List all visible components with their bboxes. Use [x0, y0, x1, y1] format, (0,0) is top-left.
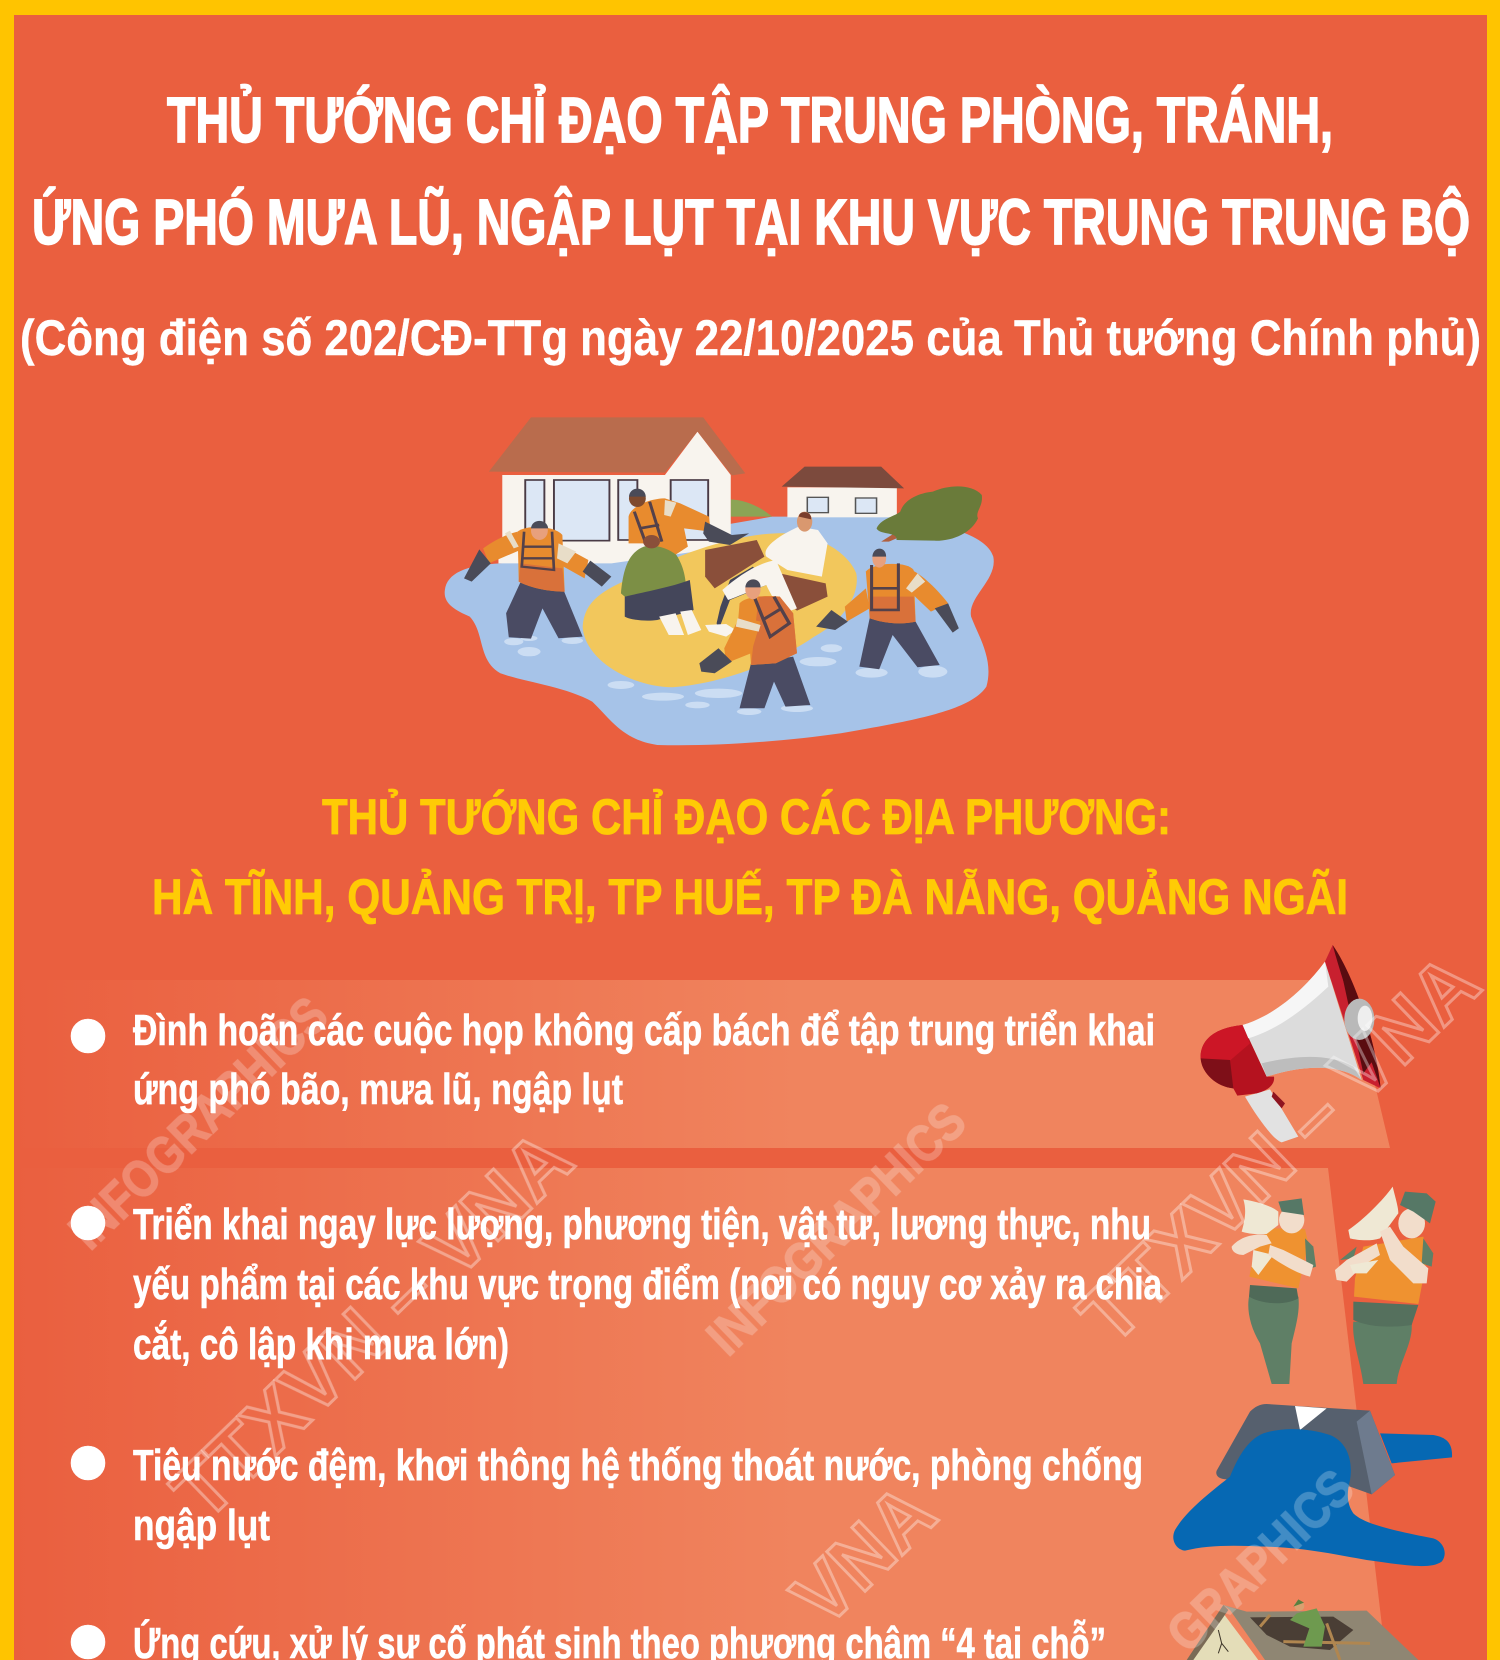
small house — [782, 467, 904, 517]
directive 1 — [71, 1006, 1155, 1114]
illustration: flood rescue — [445, 417, 994, 745]
worker: front — [699, 579, 810, 708]
icon: megaphone — [1201, 945, 1381, 1142]
section heading: THỦ TƯỚNG CHỈ ĐẠO CÁC ĐỊA PHƯƠNG: — [322, 788, 1171, 845]
flood water — [445, 517, 994, 745]
directive 3: ngập lụt — [133, 1501, 270, 1550]
soldier left — [1232, 1198, 1316, 1384]
raft — [583, 533, 857, 687]
worker: back — [629, 489, 749, 557]
bush — [877, 486, 982, 542]
directive 2: Triển khai ngay lực lượng, phương tiện, vật tư, lương thực, nhu — [133, 1200, 1151, 1249]
watermark: TTXVN - VNA outline — [155, 937, 1496, 1642]
icon: flood water over clothes — [1173, 1404, 1452, 1566]
woman on raft — [621, 535, 701, 635]
watermark: TTXVN - VNA outline: VNA — [775, 1467, 952, 1642]
worker: right — [816, 549, 959, 669]
watermark: INFOGRAPHICS — [58, 986, 1365, 1660]
icon: soldiers carrying sandbags — [1232, 1187, 1436, 1384]
directive 4 — [71, 1618, 1106, 1660]
worker: left — [464, 521, 611, 639]
watermark: INFOGRAPHICS: GRAPHICS — [1156, 1459, 1365, 1660]
directive 3: Tiêu nước đệm, khơi thông hệ thống thoát nước, phòng chống — [133, 1441, 1143, 1490]
water ripples — [504, 636, 947, 715]
house — [489, 417, 772, 563]
section heading — [152, 788, 1348, 925]
icon: soldier repairing roof — [1187, 1599, 1418, 1660]
directive 2: yếu phẩm tại các khu vực trọng điểm (nơi có nguy cơ xảy ra chia — [133, 1260, 1162, 1309]
watermark: INFOGRAPHICS: INFOGRAPHICS — [58, 986, 339, 1261]
soldier right — [1335, 1187, 1436, 1384]
directive 2 — [71, 1200, 1162, 1369]
title — [32, 83, 1470, 258]
directive 1: ứng phó bão, mưa lũ, ngập lụt — [133, 1065, 623, 1114]
bags and man on raft — [705, 512, 828, 637]
directive 2: cắt, cô lập khi mưa lớn) — [133, 1319, 509, 1369]
directive 3 — [71, 1441, 1143, 1550]
watermark: TTXVN - VNA outline: TTXVN – VNA — [1062, 937, 1496, 1360]
watermark: INFOGRAPHICS: INFOGRAPHICS — [696, 1092, 977, 1367]
panel: first directive band — [14, 980, 1390, 1148]
panel: remaining directives band — [14, 1168, 1386, 1660]
directive 1: Đình hoãn các cuộc họp không cấp bách để tập trung triển khai — [133, 1006, 1155, 1055]
watermark: TTXVN - VNA outline: TTXVN – VNA — [155, 1113, 589, 1536]
